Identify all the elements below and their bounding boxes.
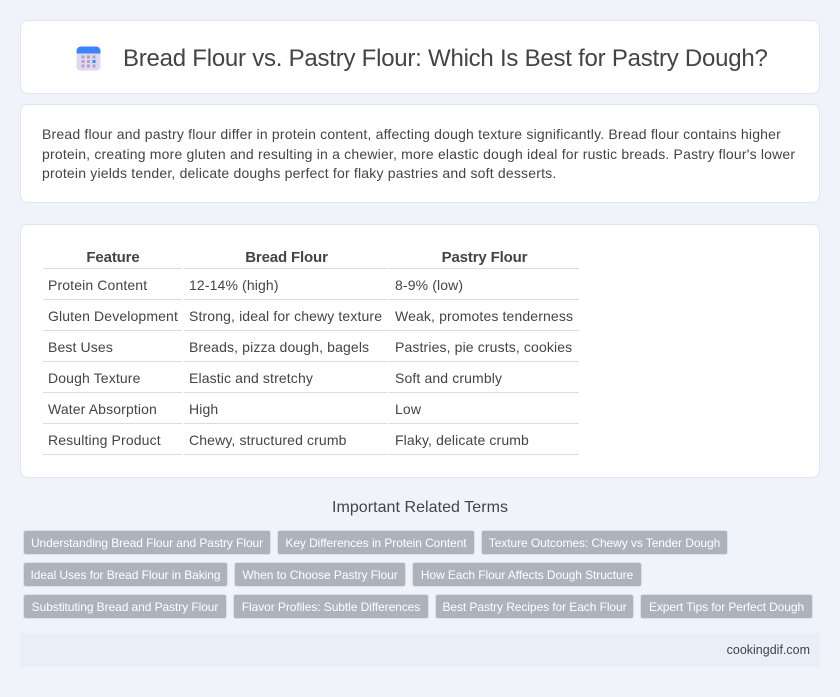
intro text: Bread flour and pastry flour differ in protein content, affecting dough texture significantly. Bread flour contains higher (42, 126, 781, 142)
table (43, 249, 579, 455)
intro panel (20, 104, 820, 203)
table: 12-14% (high) (189, 277, 279, 293)
related term tags: Expert Tips for Perfect Dough (649, 600, 804, 614)
table: Breads, pizza dough, bagels (189, 339, 369, 355)
table: Low (395, 401, 421, 417)
related term tags: Texture Outcomes: Chewy vs Tender Dough (489, 536, 720, 550)
intro text: protein, creating more gluten and resulting in a chewier, more elastic dough ideal for rustic breads. Pastry flour's lower (42, 146, 795, 162)
icon: calendar (76, 46, 100, 70)
footer bar (20, 633, 820, 667)
title: Bread Flour vs. Pastry Flour: Which Is Best for Pastry Dough? (123, 45, 768, 72)
footer domain: cookingdif.com (727, 643, 810, 657)
related term tags (23, 530, 813, 619)
table: Best Uses (48, 339, 113, 355)
related term tags: Key Differences in Protein Content (285, 536, 467, 550)
table: Bread Flour (245, 249, 328, 266)
comparison table panel (20, 224, 820, 478)
related term tags: Flavor Profiles: Subtle Differences (242, 600, 420, 614)
table: Chewy, structured crumb (189, 432, 347, 448)
related term tags: Understanding Bread Flour and Pastry Flour (31, 536, 263, 550)
table: Elastic and stretchy (189, 370, 313, 386)
table: Strong, ideal for chewy texture (189, 308, 382, 324)
table: Soft and crumbly (395, 370, 502, 386)
table: Weak, promotes tenderness (395, 308, 573, 324)
related term tags: Ideal Uses for Bread Flour in Baking (31, 568, 220, 582)
table: Pastries, pie crusts, cookies (395, 339, 572, 355)
table: High (189, 401, 218, 417)
related term tags: Substituting Bread and Pastry Flour (32, 600, 218, 614)
table: 8-9% (low) (395, 277, 463, 293)
related term tags: When to Choose Pastry Flour (242, 568, 398, 582)
table: Pastry Flour (442, 249, 527, 266)
table: Gluten Development (48, 308, 178, 324)
related terms heading: Important Related Terms (332, 499, 508, 516)
intro text: protein yields tender, delicate doughs perfect for flaky pastries and soft desserts. (42, 165, 556, 181)
header panel (20, 20, 820, 94)
table: Protein Content (48, 277, 147, 293)
table: Water Absorption (48, 401, 157, 417)
table: Dough Texture (48, 370, 140, 386)
related term tags: How Each Flour Affects Dough Structure (421, 568, 633, 582)
intro text (42, 126, 795, 181)
table: Feature (86, 249, 140, 266)
table: Flaky, delicate crumb (395, 432, 529, 448)
related term tags: Best Pastry Recipes for Each Flour (442, 600, 627, 614)
table: Resulting Product (48, 432, 161, 448)
